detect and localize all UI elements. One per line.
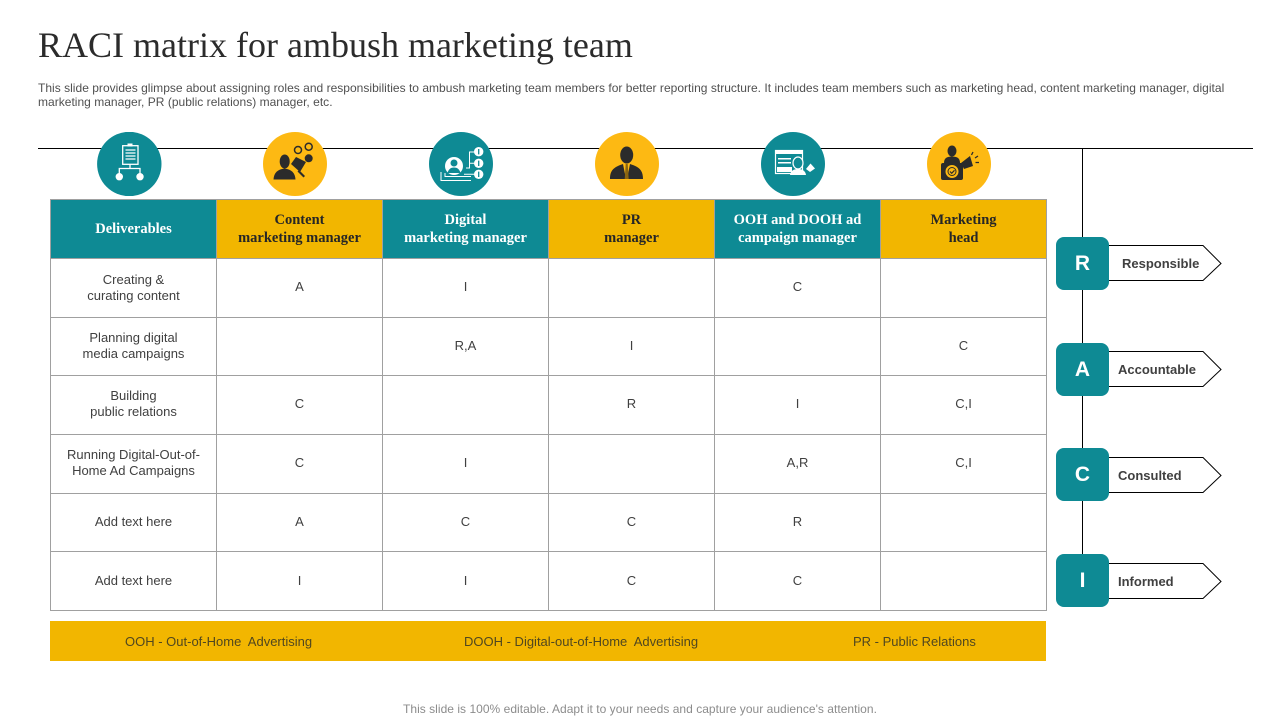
- row: Add text here 2: I: [464, 573, 467, 588]
- legend item: Consulted: [1056, 448, 1222, 501]
- icon: marketing head with camera and megaphone: [927, 132, 991, 196]
- legend item: Responsible: R: [1075, 252, 1090, 274]
- header: OOH and DOOH ad campaign manager: campaign manager: [738, 230, 857, 246]
- icon: content marketing person with megaphone: [263, 132, 327, 196]
- row: Creating & curating content: I: [464, 279, 467, 294]
- row: Planning digital media campaigns: C: [959, 338, 968, 353]
- row: Planning digital media campaigns: [50, 318, 1047, 376]
- row: Running Digital-Out-of-Home Ad Campaigns: I: [464, 455, 467, 470]
- header: OOH and DOOH ad campaign manager: [715, 199, 881, 259]
- header: Digital marketing manager: [383, 199, 549, 259]
- row: Building public relations: public relations: [90, 404, 177, 419]
- header: Marketing head: [881, 199, 1047, 259]
- row: Add text here 1: R: [793, 514, 802, 529]
- legend item: Informed: [1056, 554, 1222, 607]
- row: Running Digital-Out-of-Home Ad Campaigns: [50, 435, 1047, 494]
- legend item: Informed: I: [1080, 568, 1085, 592]
- row: Building public relations: Building: [110, 388, 157, 403]
- row: Add text here 1: A: [295, 514, 304, 529]
- header: Content marketing manager: marketing manager: [238, 230, 361, 246]
- legend item: Responsible: [1056, 237, 1222, 290]
- row: Building public relations: C,I: [955, 396, 972, 411]
- row: Creating & curating content: curating content: [87, 288, 180, 303]
- header: Content marketing manager: [217, 199, 383, 259]
- header: Deliverables: [50, 199, 217, 259]
- row: Building public relations: C: [295, 396, 304, 411]
- header: Content marketing manager: Content: [275, 212, 324, 228]
- row: Running Digital-Out-of-Home Ad Campaigns: C,I: [955, 455, 972, 470]
- PR abbreviation: PR - Public Relations: [853, 634, 976, 649]
- row: Planning digital media campaigns: I: [630, 338, 633, 353]
- description text: [38, 81, 1224, 109]
- icon: OOH campaign web page and person: [761, 132, 825, 196]
- legend item: Consulted: C: [1075, 462, 1090, 486]
- row: Add text here 2: Add text here: [95, 573, 172, 588]
- legend item: Consulted: Consulted: [1118, 468, 1182, 483]
- description text: This slide provides glimpse about assigning roles and responsibilities to ambush marketing team members for better reporting structure. It includes team members such as marketing head, content marketing manager, digital: [38, 81, 1224, 95]
- row: Running Digital-Out-of-Home Ad Campaigns: Home Ad Campaigns: [72, 463, 195, 478]
- row: Creating & curating content: A: [295, 279, 304, 294]
- abbreviations bar: [50, 621, 1046, 661]
- legend item: Accountable: Accountable: [1118, 362, 1196, 377]
- header: Digital marketing manager: marketing manager: [404, 230, 527, 246]
- legend item: Informed: Informed: [1118, 574, 1174, 589]
- row: Add text here 2: [50, 552, 1047, 611]
- header: Marketing head: head: [949, 230, 978, 246]
- icon: deliverables clipboard: [97, 132, 162, 196]
- row: Building public relations: R: [627, 396, 636, 411]
- row: Planning digital media campaigns: Planning digital: [89, 330, 178, 345]
- row: Add text here 2: C: [793, 573, 802, 588]
- OOH abbreviation: OOH - Out-of-Home Advertising: [125, 634, 312, 649]
- footer note: This slide is 100% editable. Adapt it to your needs and capture your audience's attention.: [403, 702, 877, 716]
- row: Building public relations: I: [796, 396, 799, 411]
- legend item: Accountable: A: [1075, 358, 1090, 380]
- icon: PR manager in suit: [595, 132, 659, 196]
- header: Digital marketing manager: Digital: [445, 212, 486, 228]
- description text: marketing manager, PR (public relations) manager, etc.: [38, 95, 333, 109]
- row: Creating & curating content: C: [793, 279, 802, 294]
- row: Planning digital media campaigns: media campaigns: [83, 346, 184, 361]
- row: Add text here 2: C: [627, 573, 636, 588]
- DOOH abbreviation: DOOH - Digital-out-of-Home Advertising: [464, 634, 698, 649]
- header: PR manager: [549, 199, 715, 259]
- header: OOH and DOOH ad campaign manager: OOH and DOOH ad: [734, 212, 861, 228]
- legend item: Accountable: [1056, 343, 1222, 396]
- header: Marketing head: Marketing: [930, 212, 997, 228]
- row: Building public relations: [50, 376, 1047, 435]
- row: Creating & curating content: Creating &: [103, 272, 164, 287]
- row: Add text here 1: Add text here: [95, 514, 172, 529]
- icon: digital marketing person and dollars: [429, 132, 493, 196]
- vertical legend line: [1082, 148, 1083, 593]
- title: RACI matrix for ambush marketing team: [38, 25, 633, 65]
- horizontal timeline line: [38, 148, 1253, 149]
- row: Planning digital media campaigns: R,A: [455, 338, 476, 353]
- header: PR manager: PR: [622, 212, 641, 228]
- row: Creating & curating content: [50, 259, 1047, 318]
- row: Add text here 1: C: [627, 514, 636, 529]
- header: Deliverables: Deliverables: [95, 221, 172, 237]
- row: Running Digital-Out-of-Home Ad Campaigns: A,R: [787, 455, 808, 470]
- row: Running Digital-Out-of-Home Ad Campaigns: C: [295, 455, 304, 470]
- row: Add text here 1: [50, 494, 1047, 552]
- row: Running Digital-Out-of-Home Ad Campaigns: Running Digital-Out-of-: [67, 447, 200, 462]
- header: PR manager: manager: [604, 230, 659, 246]
- row: Add text here 2: I: [298, 573, 301, 588]
- row: Add text here 1: C: [461, 514, 470, 529]
- legend item: Responsible: Responsible: [1122, 256, 1199, 271]
